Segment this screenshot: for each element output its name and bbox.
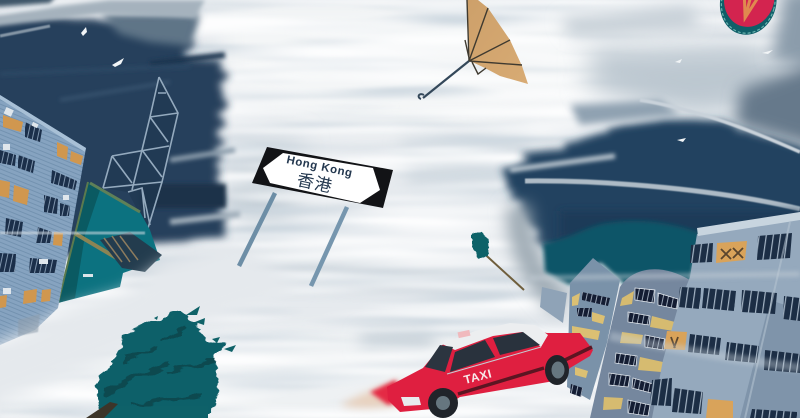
TAXI label: TAXI — [462, 366, 493, 387]
mist over left buildings — [0, 230, 259, 397]
tree: large teal tree — [86, 306, 236, 418]
dark windows — [0, 122, 77, 273]
red taxi — [340, 323, 593, 418]
small blown tree — [471, 230, 524, 290]
building: Bank of China Tower — [103, 77, 178, 228]
stripe — [458, 347, 592, 394]
car body — [387, 325, 593, 412]
sign board — [252, 147, 393, 208]
building: teal podium — [58, 182, 162, 303]
road sign: Hong Kong: 香港 — [295, 170, 334, 196]
building: curved apartment left wing — [567, 258, 620, 400]
orange boarded windows — [0, 115, 83, 308]
dark windows — [650, 233, 800, 418]
wheels — [428, 388, 458, 418]
white roof — [442, 323, 548, 350]
storm clouds: upper left — [0, 0, 240, 260]
badge: red circular emblem — [720, 0, 777, 35]
distant building — [540, 287, 567, 323]
road sign: Hong Kong — [239, 147, 393, 286]
building: left apartment block — [0, 95, 86, 345]
sign text: Hong Kong — [285, 154, 354, 180]
boarded orange windows — [664, 241, 747, 418]
roof light — [458, 330, 470, 338]
air conditioners — [3, 107, 69, 294]
window sill — [447, 347, 541, 374]
motion blur — [340, 380, 402, 408]
building: curved apartment — [590, 269, 690, 418]
storm clouds: right — [500, 0, 800, 305]
headlight — [401, 397, 421, 406]
background: white wind sweep — [96, 4, 596, 406]
debris flecks — [81, 27, 773, 142]
windows — [425, 345, 453, 372]
building: right apartment block — [650, 212, 800, 418]
wind streaks over buildings — [530, 274, 800, 368]
sign posts — [239, 193, 275, 266]
umbrella blown inside out — [419, 0, 528, 99]
green hillside — [543, 221, 700, 285]
